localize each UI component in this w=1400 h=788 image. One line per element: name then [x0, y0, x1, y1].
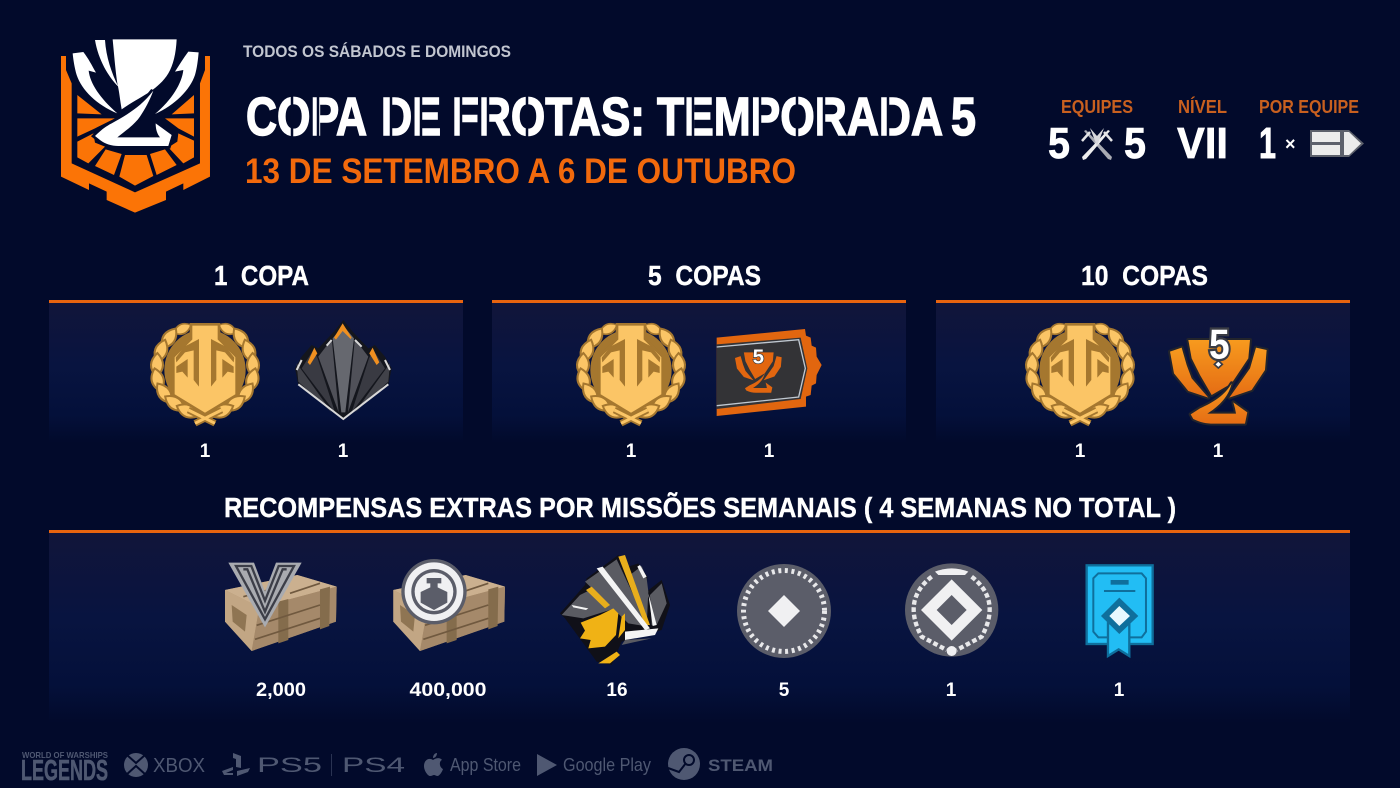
count: 1: [1213, 441, 1224, 462]
stat: per team: ×: [1285, 134, 1296, 154]
reward: crate with V badge: [225, 563, 337, 651]
logo: Steam: STEAM: [708, 756, 773, 775]
count: 5: [779, 680, 790, 701]
icon: orange trophy with 5: [1170, 320, 1267, 424]
panel: 10 cups: [936, 260, 1350, 462]
logo: Google Play: Google Play: [563, 755, 651, 775]
count: 1: [626, 441, 637, 462]
logo: App Store: [424, 753, 521, 776]
heading: RECOMPENSAS EXTRAS POR MISSÕES SEMANAIS ( 4 SEMANAS NO TOTAL ): [224, 492, 1176, 523]
icon: dark fan emblem: [295, 320, 392, 420]
reward: signal disc: [737, 564, 831, 658]
icon: orange trophy with 5: 5: [1209, 320, 1230, 367]
count: 1: [946, 680, 957, 701]
stat: tier: VII: [1177, 119, 1228, 168]
title: COPA: [246, 87, 367, 147]
panel: 1 cup: [49, 260, 463, 462]
panel background: [49, 533, 1350, 723]
stat: teams: 5: [1048, 119, 1070, 168]
stat: per team: POR EQUIPE: [1259, 97, 1359, 117]
logo: Xbox: [124, 753, 205, 777]
panel: 5 cups: [492, 260, 906, 462]
logo: PlayStation: PS5: [257, 754, 322, 777]
stat: per team: 1: [1259, 119, 1276, 168]
logo: World of Warships Legends: WORLD OF WARSHIPS: [22, 750, 108, 760]
heading: 5 COPAS: [648, 260, 761, 291]
panel background: [492, 303, 906, 443]
stat: per team: [1259, 97, 1364, 168]
reward: camouflage emblem: [560, 555, 670, 665]
shield outline: [61, 56, 210, 213]
icon: gold medal: [575, 321, 687, 423]
count: 1: [1114, 680, 1125, 701]
icon: orange ticket: [717, 329, 822, 416]
reward: laurel disc: [905, 563, 998, 657]
title: [246, 87, 976, 147]
icon: gold medal: [149, 321, 261, 423]
stat: teams: EQUIPES: [1061, 97, 1133, 117]
logo: Google Play: [537, 754, 651, 776]
icon: orange ticket: 5: [753, 346, 764, 369]
count: 1: [764, 441, 775, 462]
logo: World of Warships Legends: [21, 750, 108, 787]
icon: crossed swords: [1082, 128, 1112, 160]
count: 1: [338, 441, 349, 462]
footer: platform logos: [21, 748, 773, 787]
panel background: [49, 303, 463, 443]
sunburst wedges: [77, 95, 194, 186]
icon: gold medal: [1024, 321, 1136, 423]
count: 2,000: [256, 680, 306, 701]
count: 16: [606, 680, 628, 701]
count: 400,000: [410, 680, 486, 701]
count: 1: [200, 441, 211, 462]
heading: 10 COPAS: [1081, 260, 1208, 291]
title: 5: [951, 87, 976, 147]
panel: weekly missions: [49, 492, 1350, 723]
count: 1: [1075, 441, 1086, 462]
panel background: [936, 303, 1350, 443]
title: FROTAS:: [452, 87, 645, 147]
title: TEMPORADA: [657, 87, 943, 147]
reward: crate with coin: [393, 559, 505, 651]
dates subtitle: 13 DE SETEMBRO A 6 DE OUTUBRO: [245, 152, 796, 191]
trophy: [73, 39, 199, 146]
logo: World of Warships Legends: LEGENDS: [21, 755, 108, 787]
stat: tier: [1177, 96, 1228, 168]
stat: teams: 5: [1124, 119, 1146, 168]
logo: orange shield with white trophy: [61, 39, 210, 213]
logo: Steam: [668, 748, 773, 780]
logo: PlayStation: [222, 753, 405, 777]
heading: 1 COPA: [214, 260, 309, 291]
logo: Xbox: XBOX: [153, 755, 205, 777]
stat: tier: NÍVEL: [1178, 96, 1227, 117]
title: DE: [381, 87, 441, 147]
stat: teams: [1048, 97, 1146, 168]
logo: PlayStation: PS4: [342, 754, 405, 777]
reward: blue certificate: [1087, 565, 1153, 656]
event schedule label: TODOS OS SÁBADOS E DOMINGOS: [243, 42, 511, 61]
logo: App Store: App Store: [450, 755, 521, 775]
icon: ship ammo: [1310, 130, 1364, 157]
